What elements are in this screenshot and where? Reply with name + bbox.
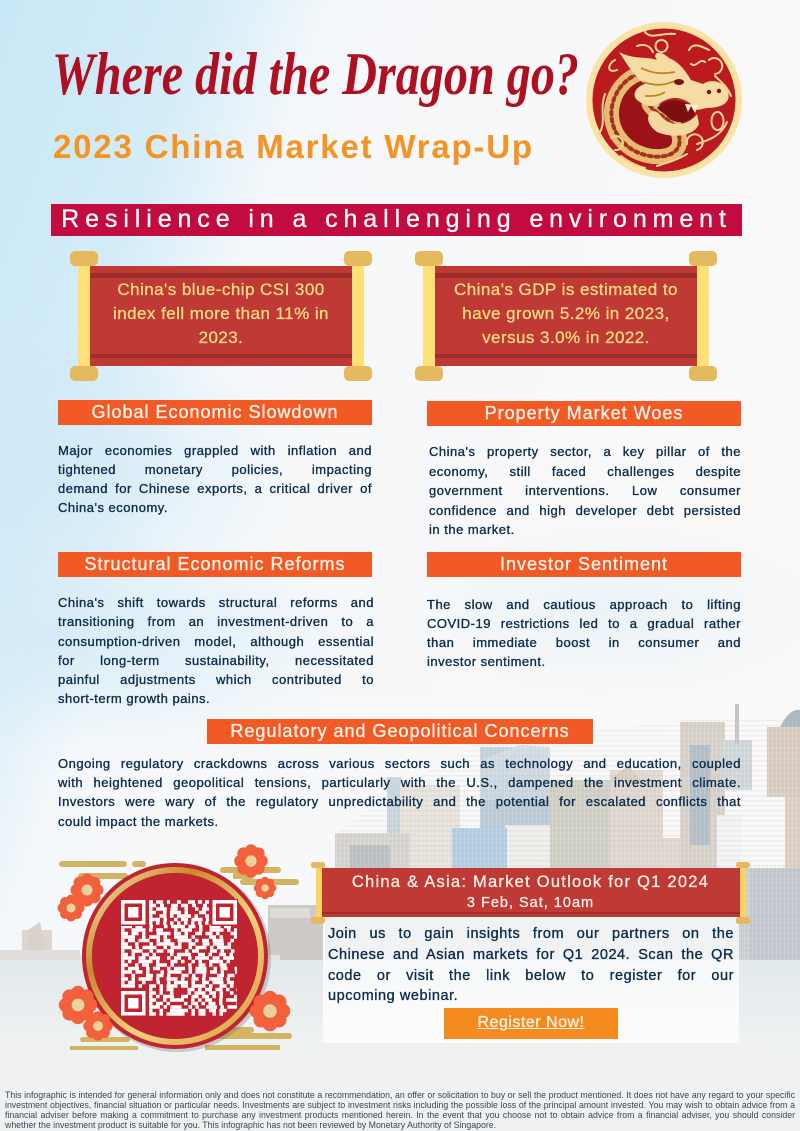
scroll: CSI 300 [70, 251, 372, 381]
text: Global Economic Slowdown: China's economy. [58, 500, 168, 515]
webinar panel [323, 917, 739, 1043]
heading: Investor Sentiment [427, 552, 741, 577]
heading: Property Market Woes [427, 401, 741, 426]
text: Global Economic Slowdown: tightened monetary policies, impacting [58, 462, 372, 477]
heading: Property Market Woes: Property Market Woes [485, 403, 683, 423]
text: Investor Sentiment: than immediate boost in consumer and [427, 635, 741, 650]
disclaimer: whether the investment product is suitable for you. This infographic has not been reviewed by Monetary Authority of Singapore. [5, 1120, 496, 1130]
text: Regulatory and Geopolitical Concerns: could impact the markets. [58, 814, 219, 829]
text: webinar description: upcoming webinar. [328, 988, 458, 1004]
banner heading: Resilience in a challenging environment [61, 205, 732, 233]
text: Regulatory and Geopolitical Concerns: Ongoing regulatory crackdowns across various sectors such as technology and education, coupled [58, 756, 741, 771]
text: Investor Sentiment [427, 597, 741, 669]
text: Structural Economic Reforms [58, 595, 374, 706]
QR code [120, 899, 238, 1017]
text: Structural Economic Reforms: painful adjustments which contributed to [58, 672, 374, 687]
heading: Global Economic Slowdown [58, 400, 372, 425]
text: Property Market Woes: in the market. [429, 522, 515, 537]
text: Property Market Woes: government interventions. Low consumer [429, 483, 741, 498]
text: Structural Economic Reforms: short-term growth pains. [58, 691, 210, 706]
disclaimer: investment objectives, financial situation or particular needs. Investments are subject to investment risks including the possible loss of the principal amount invested. You may wish to obtain advice from a [5, 1100, 795, 1110]
text: Structural Economic Reforms: for long-term sustainability, necessitated [58, 653, 374, 668]
heading: Global Economic Slowdown: Global Economic Slowdown [91, 402, 339, 422]
scroll: webinar title: China & Asia: Market Outlook for Q1 2024 [352, 873, 709, 891]
text: Property Market Woes: confidence and high developer debt persisted [429, 502, 741, 518]
text: Global Economic Slowdown [58, 443, 372, 515]
heading: Structural Economic Reforms: Structural Economic Reforms [84, 554, 346, 574]
scroll: GDP: have grown 5.2% in 2023, [462, 304, 670, 323]
text: Regulatory and Geopolitical Concerns: Investors were wary of the regulatory unpredictability and the potential for escalated conflicts that [58, 794, 741, 809]
disclaimer: This infographic is intended for general information only and does not constitute a recommendation, an offer or solicitation to buy or sell the product mentioned. It does not have any regard to your specific [5, 1090, 795, 1100]
text: Structural Economic Reforms: consumption-driven model, although essential [58, 634, 374, 649]
text: Regulatory and Geopolitical Concerns: with heightened geopolitical tensions, particularly with the U.S., dampened the investment climate. [58, 775, 741, 790]
icon: dragon medallion [586, 22, 742, 178]
text: webinar description [328, 926, 734, 1004]
text: Structural Economic Reforms: China's shift towards structural reforms and [58, 595, 374, 610]
text: webinar description: Join us to gain insights from our partners on the [328, 926, 734, 942]
text: Regulatory and Geopolitical Concerns [58, 756, 741, 829]
heading: Investor Sentiment: Investor Sentiment [500, 554, 668, 574]
heading: Regulatory and Geopolitical Concerns: Regulatory and Geopolitical Concerns [230, 721, 570, 741]
text: Property Market Woes: China's property sector, a key pillar of the [429, 444, 741, 459]
scroll: CSI 300: 2023. [199, 328, 243, 347]
scroll: CSI 300: China's blue-chip CSI 300 [117, 280, 325, 299]
scroll: GDP: China's GDP is estimated to [454, 280, 678, 299]
text: webinar description: Chinese and Asian markets for Q1 2024. Scan the QR [328, 947, 734, 963]
disclaimer [5, 1090, 795, 1130]
text: Investor Sentiment: investor sentiment. [427, 654, 546, 669]
text: Investor Sentiment: The slow and cautious approach to lifting [427, 597, 741, 612]
text: Global Economic Slowdown: demand for Chinese exports, a critical driver of [58, 481, 372, 496]
scroll: webinar title [311, 862, 750, 924]
button: Register Now: Register Now! [478, 1014, 584, 1031]
text: Investor Sentiment: COVID-19 restrictions led to a gradual rather [427, 616, 741, 631]
disclaimer: financial adviser before making a commitment to purchase any investment products mentioned herein. In the event that you choose not to obtain advice from a financial adviser, you should consider [5, 1110, 795, 1120]
gold clouds [59, 861, 299, 1050]
QR medallion with clouds and flowers [58, 844, 299, 1052]
heading: Structural Economic Reforms [58, 552, 372, 577]
scroll: GDP [415, 251, 717, 381]
scroll: webinar title: 3 Feb, Sat, 10am [467, 895, 594, 911]
scroll: GDP: versus 3.0% in 2022. [482, 328, 650, 347]
text: webinar description: code or visit the link below to register for our [328, 968, 734, 984]
text: Global Economic Slowdown: Major economies grappled with inflation and [58, 443, 372, 458]
button: Register Now [444, 1008, 618, 1039]
text: Property Market Woes [429, 444, 741, 537]
flowers [70, 874, 104, 906]
text: Property Market Woes: economy, still faced challenges despite [429, 464, 741, 478]
scroll: CSI 300: index fell more than 11% in [113, 304, 329, 323]
text: Structural Economic Reforms: transitioning from an investment-driven to a [58, 614, 374, 629]
subtitle: 2023 China Market Wrap-Up [53, 128, 534, 165]
